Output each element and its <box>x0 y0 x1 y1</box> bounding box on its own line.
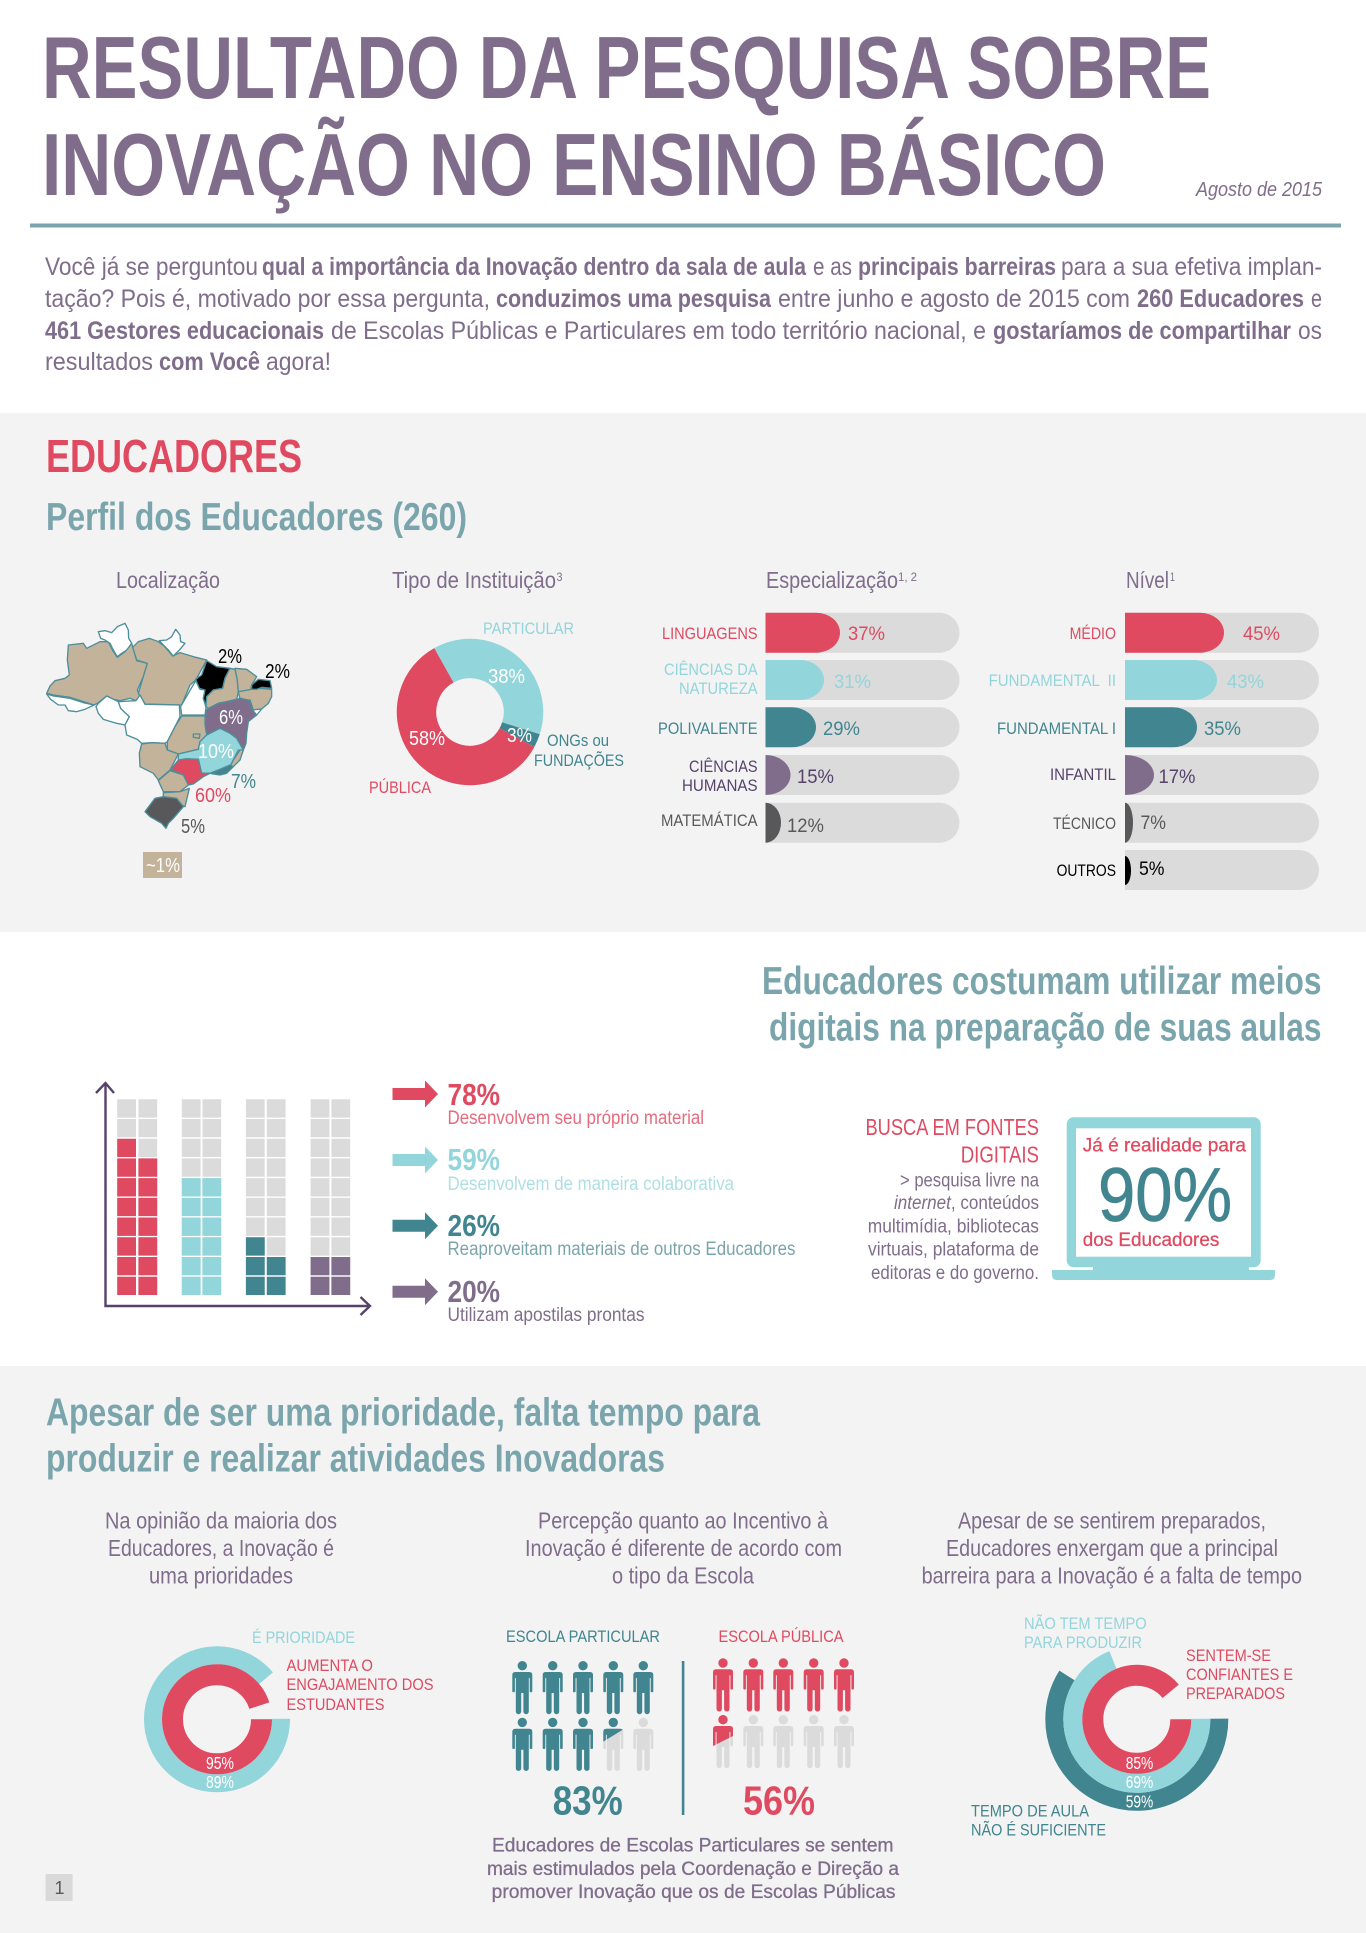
donut chart: institution type: PÚBLICA <box>369 778 432 797</box>
intro paragraph: gostaríamos de compartilhar <box>993 317 1291 345</box>
donut chart: institution type: FUNDAÇÕES <box>534 751 624 770</box>
text: school comparison: Educadores de Escolas Particulares se sentem <box>492 1836 894 1857</box>
bar chart: specialization: 15% <box>797 766 834 788</box>
intro paragraph: 260 Educadores <box>1137 285 1304 313</box>
text: barrier intro: Educadores enxergam que a principal <box>946 1535 1278 1561</box>
bar chart: level: 35% <box>1204 718 1241 740</box>
pictogram: private school: 83% <box>553 1777 623 1823</box>
map legend: ~1% <box>146 855 180 877</box>
text: priority intro: Educadores, a Inovação é <box>108 1535 334 1561</box>
icon: laptop with 90 percent: 90% <box>1098 1153 1232 1238</box>
panel: digital resources <box>96 960 1322 1326</box>
bar chart: specialization: CIÊNCIAS DA <box>664 660 758 679</box>
specialization heading: Especialização <box>766 567 898 593</box>
intro paragraph: os <box>1298 317 1322 345</box>
bar chart: level: 17% <box>1158 766 1196 788</box>
map of Brazil: 10% <box>198 741 234 763</box>
map of Brazil <box>47 623 290 878</box>
bar chart: level: FUNDAMENTAL I <box>997 719 1116 738</box>
bar chart: specialization <box>658 613 960 843</box>
donut chart: institution type: 58% <box>409 728 445 750</box>
radial chart: priority: AUMENTA O <box>286 1656 373 1675</box>
stat: handouts: 20% <box>448 1274 500 1309</box>
bar chart: specialization: MATEMÁTICA <box>661 811 758 830</box>
map of Brazil: 2% <box>265 661 290 683</box>
bar chart: level: 45% <box>1243 623 1280 645</box>
text block: digital search: internet, conteúdos <box>894 1192 1039 1214</box>
text: school comparison: promover Inovação que os de Escolas Públicas <box>492 1882 896 1903</box>
radial chart: barriers: NÃO É SUFICIENTE <box>971 1821 1106 1840</box>
institution type heading: 3 <box>556 570 563 584</box>
bar chart: level: 7% <box>1140 812 1166 834</box>
page number <box>46 1874 73 1901</box>
intro paragraph: e as <box>813 253 852 281</box>
intro paragraph: de Escolas Públicas e Particulares em todo território nacional, e <box>331 317 986 345</box>
radial chart: barriers: NÃO TEM TEMPO <box>1024 1614 1147 1633</box>
radial chart: priority: 89% <box>206 1772 234 1792</box>
donut chart: institution type: 3% <box>507 725 532 747</box>
bar chart: level: 5% <box>1139 858 1164 880</box>
radial chart: barriers: TEMPO DE AULA <box>971 1802 1090 1821</box>
text: incentive intro: o tipo da Escola <box>612 1562 754 1588</box>
bar chart: specialization: 37% <box>848 623 885 645</box>
title: INOVAÇÃO NO ENSINO BÁSICO <box>42 115 1106 214</box>
bar chart: level <box>989 613 1319 890</box>
text: barrier intro <box>922 1508 1302 1588</box>
bar chart: specialization: NATUREZA <box>679 679 758 698</box>
bar chart: specialization: 29% <box>823 718 860 740</box>
bar chart: specialization: HUMANAS <box>682 776 758 795</box>
stat: collaborative: Desenvolvem de maneira colaborativa <box>448 1174 734 1195</box>
stat: collaborative: 59% <box>448 1142 500 1177</box>
text: barrier intro: barreira para a Inovação é a falta de tempo <box>922 1562 1302 1588</box>
intro paragraph: 461 Gestores educacionais <box>45 317 324 345</box>
text: priority intro: Na opinião da maioria dos <box>105 1508 337 1534</box>
radial chart: barriers <box>971 1614 1293 1840</box>
map of Brazil: 7% <box>231 771 256 793</box>
intro paragraph: principais barreiras <box>858 253 1056 281</box>
bar chart: level: 43% <box>1227 671 1264 693</box>
date: Agosto de 2015 <box>1195 179 1323 201</box>
donut chart: institution type: PARTICULAR <box>483 619 574 638</box>
intro paragraph: qual a importância da Inovação dentro da sala de aula <box>262 253 807 281</box>
pictogram: private school <box>506 1627 660 1823</box>
map of Brazil: 60% <box>195 785 231 807</box>
radial chart: barriers: 59% <box>1126 1792 1153 1812</box>
specialization heading: 1, 2 <box>898 570 917 584</box>
title <box>42 18 1211 214</box>
bar chart: level: INFANTIL <box>1050 765 1116 784</box>
text block: digital search: DIGITAIS <box>961 1142 1039 1168</box>
panel: educators profile <box>0 413 1366 932</box>
radial chart: priority <box>153 1628 434 1792</box>
donut chart: institution type <box>369 619 624 797</box>
stat: own material: 78% <box>448 1077 500 1112</box>
heading <box>46 1392 760 1481</box>
stat: collaborative <box>392 1142 734 1195</box>
profile heading: Perfil dos Educadores (260) <box>46 496 467 539</box>
bar chart: specialization: 12% <box>787 815 824 837</box>
panel: lack of time <box>0 1366 1366 1933</box>
radial chart: priority: É PRIORIDADE <box>252 1628 355 1647</box>
intro paragraph: para a sua efetiva implan- <box>1061 253 1322 281</box>
page number: 1 <box>54 1878 65 1898</box>
bar chart: level: FUNDAMENTAL II <box>989 671 1116 690</box>
section heading: EDUCADORES <box>46 430 302 482</box>
bar chart: level: OUTROS <box>1057 861 1116 880</box>
radial chart: barriers: PREPARADOS <box>1186 1684 1285 1703</box>
text block: digital search: multimídia, bibliotecas <box>868 1216 1039 1238</box>
location heading: Localização <box>116 567 220 593</box>
map of Brazil: 5% <box>181 816 205 838</box>
level heading: 1 <box>1170 570 1175 584</box>
heading: produzir e realizar atividades Inovadoras <box>46 1438 665 1481</box>
map of Brazil: 6% <box>219 707 243 729</box>
bar chart: level: MÉDIO <box>1070 624 1116 643</box>
icon: laptop with 90 percent <box>1052 1117 1275 1280</box>
text: school comparison: mais estimulados pela Coordenação e Direção a <box>487 1859 899 1880</box>
stat: handouts <box>392 1274 644 1326</box>
intro paragraph: resultados <box>45 348 153 376</box>
radial chart: priority: ENGAJAMENTO DOS <box>286 1675 434 1694</box>
stat: reuse: 26% <box>448 1208 500 1243</box>
waffle chart <box>96 1083 370 1315</box>
icon: laptop with 90 percent: Já é realidade para <box>1083 1135 1246 1157</box>
radial chart: priority: 95% <box>206 1753 234 1773</box>
text: incentive intro: Percepção quanto ao Incentivo à <box>538 1508 828 1534</box>
bar chart: specialization: 31% <box>834 671 871 693</box>
pictogram: public school: 56% <box>743 1777 815 1823</box>
institution type heading: Tipo de Instituição <box>392 567 556 593</box>
text: priority intro <box>105 1508 337 1588</box>
radial chart: barriers: 85% <box>1126 1753 1153 1773</box>
text: barrier intro: Apesar de se sentirem preparados, <box>958 1508 1266 1534</box>
text block: digital search: BUSCA EM FONTES <box>866 1114 1039 1140</box>
text block: digital search: > pesquisa livre na <box>900 1170 1039 1192</box>
text: incentive intro: Inovação é diferente de acordo com <box>525 1535 842 1561</box>
bar chart: specialization: LINGUAGENS <box>662 624 758 643</box>
intro paragraph: com Você <box>159 348 260 376</box>
header <box>30 18 1341 228</box>
level heading: Nível <box>1126 567 1169 593</box>
icon: laptop with 90 percent: dos Educadores <box>1083 1229 1220 1251</box>
intro paragraph: e <box>1311 285 1322 313</box>
text: incentive intro <box>525 1508 842 1588</box>
donut chart: institution type: 38% <box>488 666 525 688</box>
donut chart: institution type: ONGs ou <box>547 731 609 750</box>
stat: reuse: Reaproveitam materiais de outros Educadores <box>448 1239 796 1260</box>
radial chart: barriers: CONFIANTES E <box>1186 1665 1293 1684</box>
text block: digital search: editoras e do governo. <box>871 1262 1039 1284</box>
bar chart: specialization: POLIVALENTE <box>658 719 758 738</box>
intro paragraph: entre junho e agosto de 2015 com <box>778 285 1130 313</box>
intro paragraph: agora! <box>266 348 331 376</box>
pictogram: public school: ESCOLA PÚBLICA <box>718 1627 844 1646</box>
heading <box>762 960 1322 1050</box>
intro paragraph: tação? Pois é, motivado por essa pergunta, <box>45 285 490 313</box>
stat: own material <box>392 1077 704 1129</box>
radial chart: barriers: 69% <box>1126 1772 1153 1792</box>
radial chart: barriers: SENTEM-SE <box>1186 1646 1271 1665</box>
text: priority intro: uma prioridades <box>149 1562 293 1588</box>
intro paragraph: conduzimos uma pesquisa <box>496 285 772 313</box>
stat: own material: Desenvolvem seu próprio material <box>448 1108 704 1129</box>
map of Brazil: 2% <box>218 646 242 668</box>
bar chart: specialization: CIÊNCIAS <box>689 757 758 776</box>
radial chart: barriers: PARA PRODUZIR <box>1024 1633 1142 1652</box>
heading: Apesar de ser uma prioridade, falta tempo para <box>46 1392 760 1435</box>
radial chart: priority: ESTUDANTES <box>286 1695 384 1714</box>
text block: digital search: virtuais, plataforma de <box>868 1239 1039 1261</box>
stat: handouts: Utilizam apostilas prontas <box>448 1305 644 1326</box>
text block: digital search <box>866 1114 1039 1284</box>
intro paragraph <box>45 253 1322 376</box>
text: school comparison <box>487 1836 899 1903</box>
pictogram: public school <box>713 1627 854 1823</box>
intro paragraph: Você já se perguntou <box>45 253 258 281</box>
bar chart: level: TÉCNICO <box>1053 814 1116 833</box>
pictogram: private school: ESCOLA PARTICULAR <box>506 1627 660 1646</box>
stat: reuse <box>392 1208 796 1260</box>
